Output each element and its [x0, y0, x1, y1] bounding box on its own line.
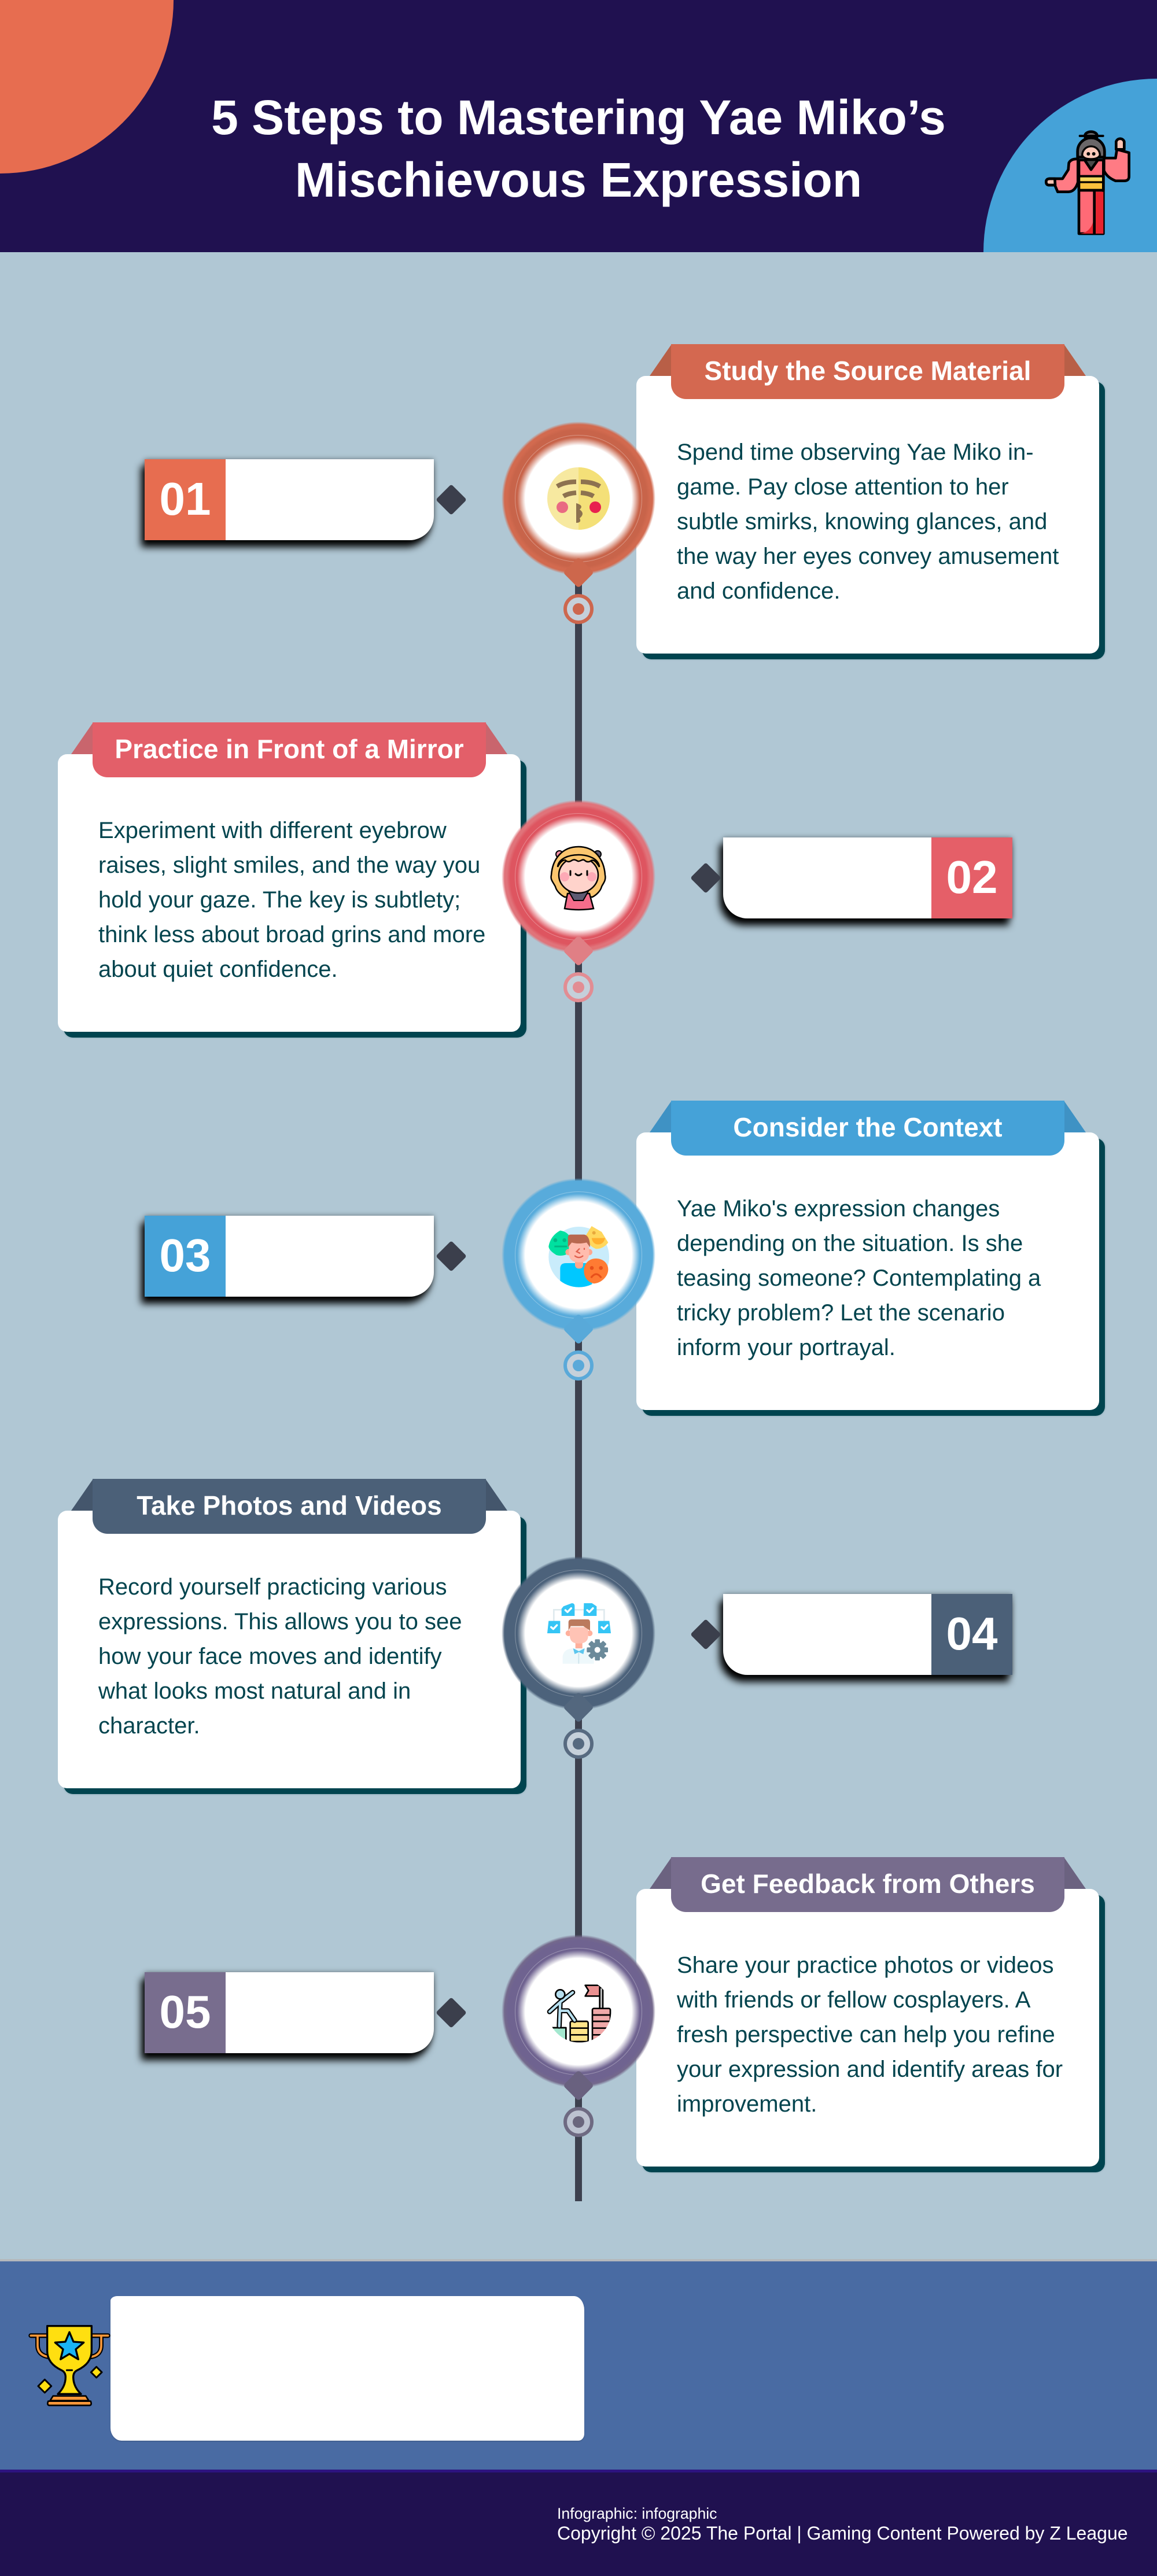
icon: kissing face emoji	[547, 467, 610, 530]
body text step 1: subtle smirks, knowing glances, and	[677, 509, 1047, 534]
step 2 number bar	[723, 837, 1012, 918]
body text step 2: Experiment with different eyebrow	[98, 818, 447, 843]
icon: climbing figure and flag	[547, 1984, 611, 2043]
step 1 number bar	[145, 459, 434, 540]
body text step 1: the way her eyes convey amusement	[677, 544, 1059, 569]
body text step 5	[677, 1953, 1063, 2117]
timeline node 2	[502, 800, 655, 1002]
timeline node 4	[502, 1557, 655, 1759]
step number 05: 05	[160, 1986, 211, 2038]
heading ribbon: Practice in Front of a Mirror: Practice in Front of a Mirror	[115, 734, 464, 764]
step number 01	[145, 459, 226, 540]
step 4 number bar	[723, 1594, 1012, 1675]
decorative blue quarter circle	[983, 79, 1157, 426]
connector diamond 3	[436, 1241, 467, 1272]
header band	[0, 0, 1157, 252]
body text step 3: inform your portrayal.	[677, 1335, 896, 1360]
heading ribbon: Consider the Context	[650, 1101, 1086, 1156]
timeline node 3	[502, 1179, 655, 1381]
body text step 1: and confidence.	[677, 578, 840, 604]
footer copyright line: Copyright © 2025 The Portal | Gaming Content Powered by Z League	[557, 2523, 1128, 2544]
body text step 3: teasing someone? Contemplating a	[677, 1265, 1041, 1291]
body text step 2: about quiet confidence.	[98, 957, 338, 982]
step number 03	[145, 1216, 226, 1297]
decorative orange quarter circle	[0, 0, 174, 174]
connector diamond 4	[690, 1619, 721, 1650]
connector diamond 5	[436, 1997, 467, 2028]
step number 01: 01	[160, 473, 211, 525]
blank white conclusion box	[110, 2296, 584, 2441]
body text step 1: Spend time observing Yae Miko in-	[677, 440, 1034, 465]
title	[211, 90, 946, 207]
body text step 5: with friends or fellow cosplayers. A	[677, 1987, 1030, 2013]
body text step 2	[98, 818, 485, 982]
timeline node 5	[502, 1935, 655, 2137]
body text step 3: tricky problem? Let the scenario	[677, 1300, 1005, 1326]
step number 04: 04	[946, 1608, 997, 1659]
panel: step 5 card	[636, 1857, 1106, 2173]
body text step 4: character.	[98, 1713, 200, 1739]
icon: trophy with star	[28, 2325, 110, 2406]
body text step 1	[677, 440, 1059, 604]
heading ribbon: Study the Source Material: Study the Source Material	[705, 356, 1031, 386]
icon: girl avatar	[550, 846, 606, 910]
step 3 number bar	[145, 1216, 434, 1297]
footer source line: Infographic: infographic	[557, 2505, 717, 2522]
title: 5 Steps to Mastering Yae Miko’s	[211, 90, 946, 145]
timeline node 1	[502, 422, 655, 624]
heading ribbon: Get Feedback from Others	[650, 1857, 1086, 1912]
panel: step 1 card	[636, 344, 1106, 660]
footer divider strip	[0, 2259, 1157, 2261]
connector diamond 2	[690, 862, 721, 894]
step number 03: 03	[160, 1230, 211, 1281]
body text step 3	[677, 1196, 1041, 1360]
body text step 2: think less about broad grins and more	[98, 922, 485, 947]
body text step 5: Share your practice photos or videos	[677, 1953, 1053, 1978]
heading ribbon: Take Photos and Videos: Take Photos and Videos	[137, 1490, 442, 1520]
body text step 4: how your face moves and identify	[98, 1644, 442, 1669]
timeline spine	[575, 499, 582, 2201]
body text step 5: fresh perspective can help you refine	[677, 2022, 1055, 2047]
step number 02	[931, 837, 1012, 918]
body text step 4: expressions. This allows you to see	[98, 1609, 462, 1634]
panel: step 3 card	[636, 1101, 1106, 1417]
body text step 2: hold your gaze. The key is subtlety;	[98, 887, 460, 913]
body text step 4	[98, 1574, 462, 1739]
panel: conclusion band	[0, 2261, 1157, 2470]
step number 02: 02	[946, 851, 997, 903]
body text step 3: Yae Miko's expression changes	[677, 1196, 1000, 1221]
connector diamond 1	[436, 484, 467, 515]
body text step 1: game. Pay close attention to her	[677, 474, 1009, 500]
icon: person with emotion masks	[548, 1226, 609, 1287]
body text step 5: improvement.	[677, 2091, 817, 2117]
footer band	[0, 2470, 1157, 2576]
body text step 3: depending on the situation. Is she	[677, 1231, 1023, 1256]
heading ribbon: Get Feedback from Others: Get Feedback from Others	[701, 1869, 1035, 1899]
body text step 5: your expression and identify areas for	[677, 2057, 1063, 2082]
panel: step 2 card	[58, 722, 528, 1039]
title: Mischievous Expression	[295, 153, 862, 207]
heading ribbon: Take Photos and Videos	[71, 1479, 507, 1534]
heading ribbon: Practice in Front of a Mirror	[71, 722, 507, 777]
step number 05	[145, 1972, 226, 2053]
body text step 2: raises, slight smiles, and the way you	[98, 852, 480, 878]
heading ribbon: Consider the Context: Consider the Context	[733, 1112, 1003, 1142]
icon: kimono character	[1045, 130, 1130, 235]
body text step 4: what looks most natural and in	[98, 1678, 411, 1704]
body text step 4: Record yourself practicing various	[98, 1574, 447, 1600]
panel: step 4 card	[58, 1479, 528, 1795]
step 5 number bar	[145, 1972, 434, 2053]
step number 04	[931, 1594, 1012, 1675]
icon: person with checklist and gear	[547, 1603, 611, 1664]
heading ribbon: Study the Source Material	[650, 344, 1086, 399]
